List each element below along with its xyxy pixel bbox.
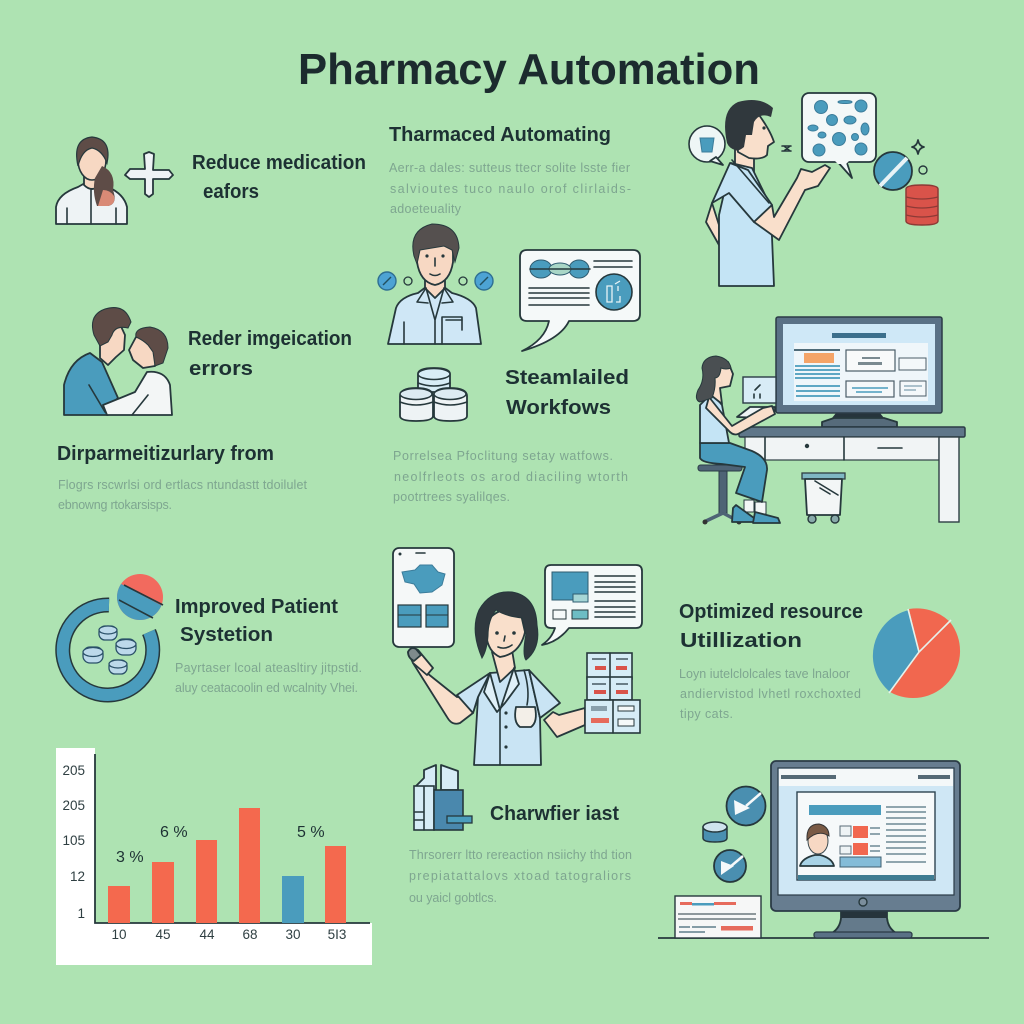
x axis labels: 44 <box>199 927 215 942</box>
text: optimized resource utilization: tipy cats. <box>680 707 733 721</box>
text: charwfier iast: ou yaicl gobtlcs. <box>409 891 497 905</box>
y axis labels: 12 <box>70 869 85 884</box>
text: improved patient satisfaction: Improved Patient <box>175 596 338 618</box>
text: improved patient satisfaction: Payrtaser lcoal ateasltiry jitpstid. <box>175 661 362 675</box>
text: optimized resource utilization <box>679 601 863 721</box>
heading: reduce medication errors: Reduce medication <box>192 152 366 174</box>
icon: medicine cabinet <box>414 765 472 830</box>
text: dirparmeitizurlary from: Flogrs rscwrlsi ord ertlacs ntundastt tdoilulet <box>58 478 308 492</box>
heading: streamlined workflows: Steamlailed <box>505 367 629 389</box>
heading and text: pharmacy automating: Tharmaced Automating <box>389 124 611 146</box>
speech bubble: report <box>542 565 642 645</box>
icon: phone <box>393 548 454 661</box>
text: improved patient satisfaction <box>175 596 362 695</box>
heading: reder imgeication errors: Reder imgeication <box>188 328 352 350</box>
text: improved patient satisfaction: Systetion <box>180 624 273 646</box>
icon: report stack <box>585 653 640 733</box>
text: optimized resource utilization: Loyn iutelclolcales tave lnaloor <box>679 667 850 681</box>
y axis labels: 105 <box>62 833 85 848</box>
text: charwfier iast: Thrsorerr ltto rereaction nsiichy thd tion <box>409 848 632 862</box>
text: charwfier iast <box>409 803 632 905</box>
heading and text: pharmacy automating: adoeteuality <box>390 202 462 216</box>
x axis labels: 68 <box>242 927 258 942</box>
icon: stacked jars <box>400 368 467 421</box>
y axis labels: 205 <box>62 763 85 778</box>
icon: pharmacist with pills <box>378 224 493 344</box>
text: streamlined workflows description: Porrelsea Pfoclitung setay watfows. <box>393 449 613 463</box>
value labels <box>116 824 325 866</box>
heading: streamlined workflows <box>505 367 629 419</box>
bars <box>108 808 346 923</box>
speech bubble: lenses and text <box>520 250 640 351</box>
heading and text: pharmacy automating: salvioutes tuco naulo orof clirlaids- <box>390 182 631 196</box>
icon: woman at computer desk <box>696 317 965 524</box>
text: streamlined workflows description: neolfrleots os arod diaciling wtorth <box>394 470 628 484</box>
icon: desktop monitor with patient record <box>658 761 989 938</box>
y axis labels: 205 <box>62 798 85 813</box>
icon: man and child <box>64 308 172 415</box>
text: dirparmeitizurlary from: Dirparmeitizurlary from <box>57 443 274 465</box>
value labels: 6 % <box>160 824 188 841</box>
x axis labels: 30 <box>285 927 301 942</box>
heading: reder imgeication errors <box>188 328 352 380</box>
value labels: 3 % <box>116 849 144 866</box>
title: Pharmacy Automation <box>298 45 760 94</box>
x axis labels <box>111 927 346 942</box>
text: dirparmeitizurlary from <box>57 443 308 512</box>
text: optimized resource utilization: Optimized resource <box>679 601 863 623</box>
heading: reduce medication errors: eafors <box>203 181 259 203</box>
text: charwfier iast: Charwfier iast <box>490 803 619 825</box>
icon: woman with medical cross <box>56 137 173 224</box>
heading: streamlined workflows: Workfows <box>506 397 611 419</box>
heading and text: pharmacy automating: Aerr-a dales: sutteus ttecr solite lsste fier <box>389 161 630 175</box>
pie chart <box>873 608 960 698</box>
text: charwfier iast: prepiatattalovs xtoad tatograliors <box>409 869 631 883</box>
text: streamlined workflows description: pootrtrees syalilqes. <box>393 490 510 504</box>
icon: nurse with phone and reports <box>393 548 642 765</box>
value labels: 5 % <box>297 824 325 841</box>
y axis labels <box>62 763 85 921</box>
bar chart <box>56 748 372 965</box>
text: streamlined workflows description <box>393 449 628 504</box>
heading: reduce medication errors <box>192 152 366 203</box>
x axis labels: 5I3 <box>328 927 346 942</box>
text: dirparmeitizurlary from: ebnowng rtokarsisps. <box>58 498 172 512</box>
text: optimized resource utilization: Utillization <box>680 630 802 652</box>
icon: man analysing pills <box>689 93 938 286</box>
icon: pill ring <box>63 570 170 695</box>
heading: reder imgeication errors: errors <box>189 358 253 380</box>
heading and text: pharmacy automating <box>389 124 631 216</box>
text: improved patient satisfaction: aluy ceatacoolin ed wcalnity Vhei. <box>175 681 358 695</box>
x axis labels: 45 <box>155 927 171 942</box>
y axis labels: 1 <box>77 906 85 921</box>
x axis labels: 10 <box>111 927 127 942</box>
text: optimized resource utilization: andiervistod lvhetl roxchoxted <box>680 687 861 701</box>
